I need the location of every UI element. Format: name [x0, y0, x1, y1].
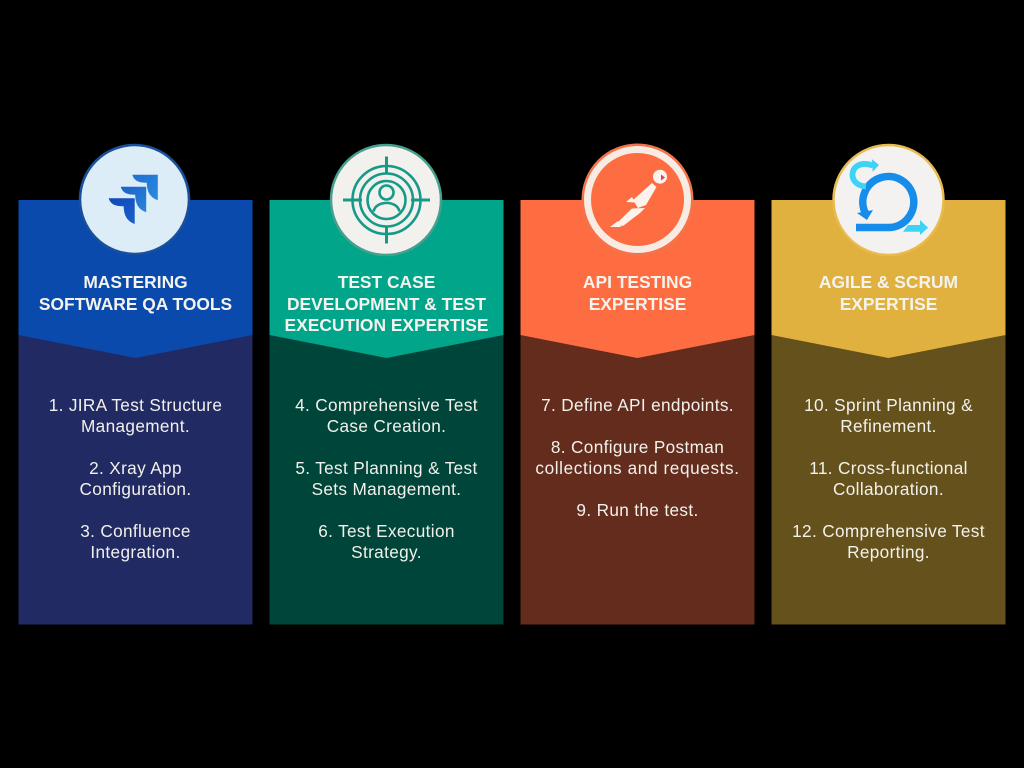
- text block: API items: collections and requests.: [535, 458, 740, 478]
- text block: agile items: Refinement.: [840, 416, 937, 436]
- panel: mastering software QA tools: [18, 145, 252, 624]
- text block: API items: 9. Run the test.: [576, 500, 699, 520]
- panel header: QA tools: [18, 200, 252, 358]
- text block: test case items: 4. Comprehensive Test: [295, 395, 478, 415]
- text block: test case items: 6. Test Execution: [318, 521, 455, 541]
- heading: QA tools: MASTERING: [83, 272, 188, 292]
- panel header: test case: [270, 200, 504, 358]
- text block: QA tools items: Integration.: [90, 542, 181, 562]
- text block: agile items: Collaboration.: [833, 479, 944, 499]
- text block: agile items: Reporting.: [847, 542, 930, 562]
- text block: test case items: Case Creation.: [327, 416, 446, 436]
- text block: test case items: 5. Test Planning & Test: [295, 458, 478, 478]
- text block: test case items: Strategy.: [351, 542, 422, 562]
- panel: API testing: [520, 144, 754, 624]
- heading: API: EXPERTISE: [589, 294, 686, 314]
- heading: test case: EXECUTION EXPERTISE: [285, 315, 488, 335]
- text block: test case items: Sets Management.: [312, 479, 461, 499]
- panel body: QA tools: [18, 300, 252, 624]
- heading: test case: TEST CASE: [338, 272, 435, 292]
- panel body: test case: [270, 300, 504, 624]
- heading: test case: DEVELOPMENT & TEST: [287, 294, 486, 314]
- text block: QA tools items: 3. Confluence: [80, 521, 191, 541]
- panel header: agile: [772, 200, 1006, 358]
- heading: agile: AGILE & SCRUM: [819, 272, 958, 292]
- icon: postman figure: [582, 144, 693, 255]
- text block: QA tools items: Management.: [81, 416, 190, 436]
- panel: agile and scrum: [772, 145, 1006, 624]
- text block: API items: 8. Configure Postman: [551, 437, 724, 457]
- icon: scrum cycle: [834, 145, 944, 255]
- panel header: API: [520, 200, 754, 358]
- text block: agile items: 12. Comprehensive Test: [792, 521, 985, 541]
- icon: target with person: [331, 145, 441, 255]
- panel body: agile: [772, 300, 1006, 624]
- panel: test case development: [270, 145, 504, 624]
- heading: agile: EXPERTISE: [840, 294, 937, 314]
- text block: QA tools items: Configuration.: [80, 479, 191, 499]
- text block: agile items: 10. Sprint Planning &: [804, 395, 973, 415]
- heading: QA tools: SOFTWARE QA TOOLS: [39, 294, 232, 314]
- heading: API: API TESTING: [583, 272, 692, 292]
- icon: jira logo: [80, 145, 189, 254]
- text block: QA tools items: 1. JIRA Test Structure: [49, 395, 222, 415]
- text block: API items: 7. Define API endpoints.: [541, 395, 734, 415]
- text block: QA tools items: 2. Xray App: [89, 458, 182, 478]
- panel body: API: [520, 300, 754, 624]
- text block: agile items: 11. Cross-functional: [809, 458, 968, 478]
